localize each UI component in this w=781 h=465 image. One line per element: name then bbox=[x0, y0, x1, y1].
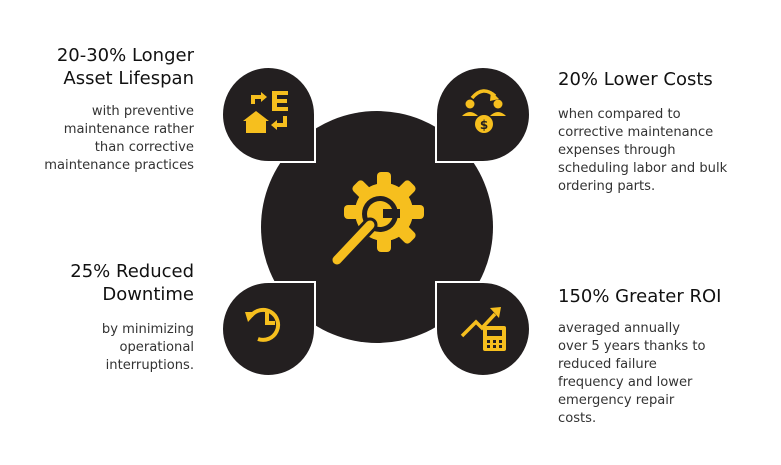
text: ROI: emergency repair bbox=[558, 393, 674, 408]
text: ROI bbox=[558, 321, 706, 426]
heading: downtime: 25% Reduced bbox=[70, 261, 194, 282]
text: costs bbox=[558, 107, 728, 194]
text: downtime bbox=[102, 322, 194, 373]
heading: lifespan bbox=[57, 45, 194, 89]
panel: bottom-right shape bbox=[436, 282, 530, 376]
text: costs: when compared to bbox=[558, 107, 681, 122]
text: costs: corrective maintenance bbox=[558, 125, 713, 140]
text: costs: ordering parts. bbox=[558, 179, 655, 194]
text: lifespan: maintenance rather bbox=[64, 122, 194, 137]
text: lifespan: maintenance practices bbox=[44, 158, 194, 173]
text: costs: expenses through bbox=[558, 143, 676, 158]
text: ROI: costs. bbox=[558, 411, 596, 426]
text: lifespan: than corrective bbox=[95, 140, 194, 155]
heading: lifespan: Asset Lifespan bbox=[63, 68, 194, 89]
icon: cost savings bbox=[462, 91, 506, 133]
panel: top-right shape bbox=[436, 67, 530, 162]
text: lifespan: with preventive bbox=[92, 104, 194, 119]
text: downtime: by minimizing bbox=[102, 322, 194, 337]
text: downtime: operational bbox=[119, 340, 194, 355]
icon: history clock bbox=[245, 310, 278, 340]
panel: bottom-left shape bbox=[222, 282, 315, 376]
heading: downtime bbox=[70, 261, 194, 305]
text: downtime: interruptions. bbox=[106, 358, 194, 373]
heading: downtime: Downtime bbox=[102, 284, 194, 305]
icon: ROI calculator bbox=[462, 307, 506, 351]
panel: top-left shape bbox=[222, 67, 315, 162]
icon: cost savings: $ bbox=[480, 118, 488, 132]
icon: lifecycle bbox=[243, 91, 288, 133]
text: ROI: reduced failure bbox=[558, 357, 657, 372]
central circle bbox=[261, 111, 493, 343]
heading: ROI: 150% Greater ROI bbox=[558, 286, 721, 307]
text: lifespan bbox=[44, 104, 194, 173]
text: ROI: over 5 years thanks to bbox=[558, 339, 706, 354]
text: ROI: averaged annually bbox=[558, 321, 680, 336]
heading: costs: 20% Lower Costs bbox=[558, 69, 713, 90]
text: ROI: frequency and lower bbox=[558, 375, 692, 390]
text: costs: scheduling labor and bulk bbox=[558, 161, 727, 176]
icon: gear and wrench bbox=[337, 172, 424, 260]
heading: lifespan: 20-30% Longer bbox=[57, 45, 194, 66]
